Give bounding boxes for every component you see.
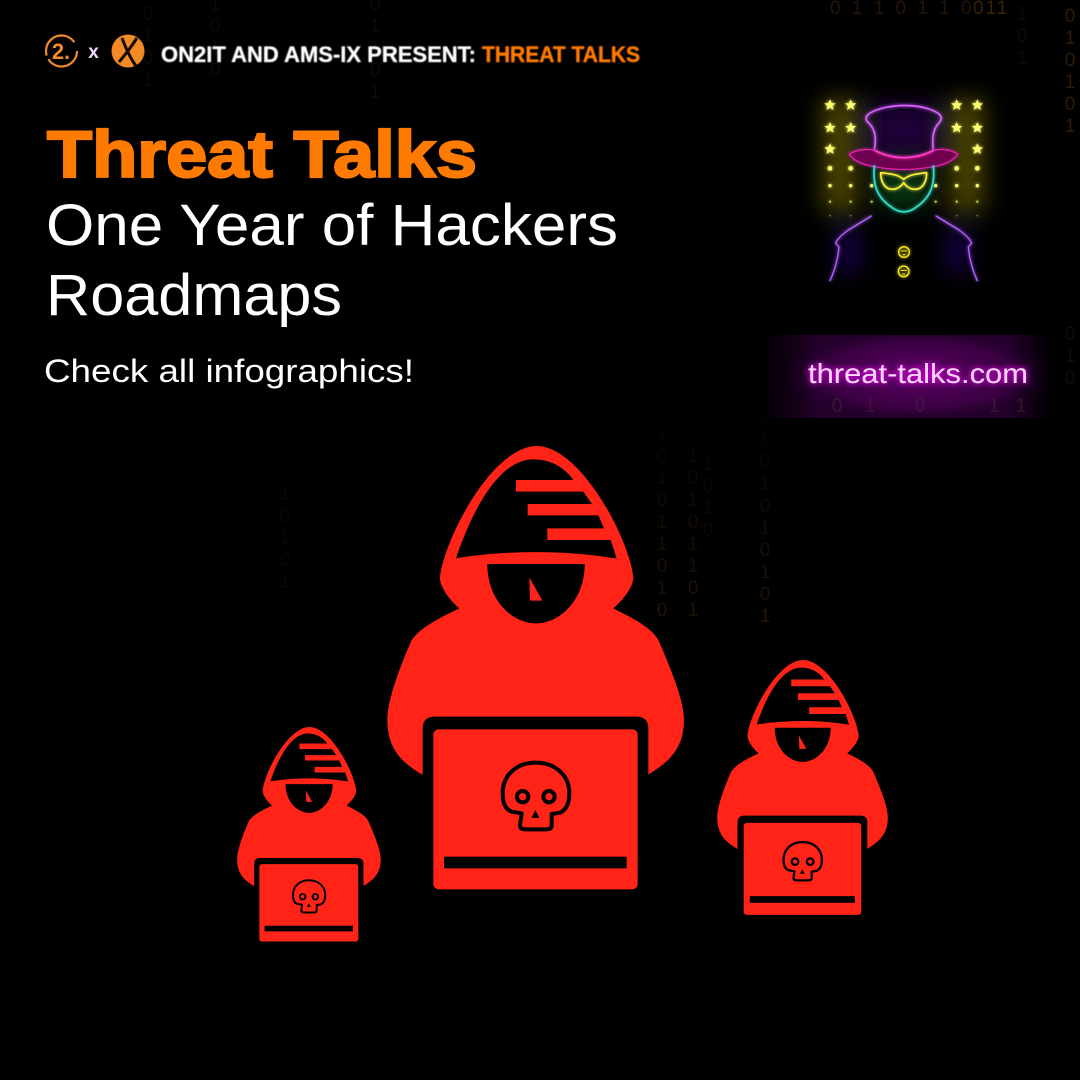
- icon: x separator: x: [88, 42, 99, 63]
- binary code rain background: 10101: [280, 484, 290, 593]
- panel: website link: [772, 335, 1048, 418]
- neon ambient glow: [822, 98, 985, 273]
- binary digits on band: 1: [989, 396, 999, 417]
- neon stars: [824, 99, 983, 216]
- binary digits on band: 1: [865, 396, 875, 417]
- binary code rain background: 0101: [143, 4, 153, 91]
- icon: ON2IT logo: [46, 36, 77, 66]
- binary code rain background: [143, 0, 1075, 627]
- binary code rain background: 101: [1017, 4, 1027, 69]
- binary code rain background: 101011010: [657, 424, 667, 621]
- website url: threat-talks.com: [808, 358, 1028, 389]
- neon hat band highlight: [875, 151, 933, 158]
- subtitle line 1: One Year of Hackers: [46, 193, 618, 258]
- illustration: small left hacker with laptop: [237, 727, 381, 943]
- band base tint: [760, 335, 1052, 418]
- binary code rain background: 1010: [703, 454, 713, 541]
- magenta glow behind url: [802, 336, 1040, 414]
- neon face: [874, 166, 934, 212]
- illustration: neon top hat hacker: [822, 98, 985, 281]
- header text: ON2IT AND AMS-IX PRESENT:: [161, 42, 476, 67]
- binary digits on band: [832, 398, 1026, 412]
- binary digits on band: 0: [832, 396, 842, 417]
- binary code rain background: 010101: [1065, 6, 1075, 137]
- neon shoulders: [830, 216, 977, 281]
- binary code rain background: 010: [1065, 324, 1075, 389]
- illustration: large hacker with laptop: [387, 446, 684, 893]
- neon hat brim: [849, 149, 958, 169]
- neon glasses: [881, 173, 927, 189]
- call to action text: Check all infographics!: [44, 353, 414, 389]
- binary digits on band: 0: [915, 396, 925, 417]
- icon: AMS-IX logo: [112, 34, 144, 68]
- icon: ON2IT logo: 2.: [52, 39, 70, 64]
- neon hat crown: [866, 105, 941, 151]
- subtitle line 2: Roadmaps: [46, 263, 342, 328]
- header bar: [46, 34, 640, 68]
- title: Threat Talks: [47, 117, 477, 191]
- illustration: medium right hacker with laptop: [717, 660, 888, 917]
- binary code rain background: 1101010101: [760, 408, 770, 627]
- neon skull buttons: [898, 247, 909, 277]
- header highlight: THREAT TALKS: [482, 42, 640, 67]
- binary code rain background: 10101101: [688, 446, 698, 621]
- binary digits on band: 1: [1016, 396, 1026, 417]
